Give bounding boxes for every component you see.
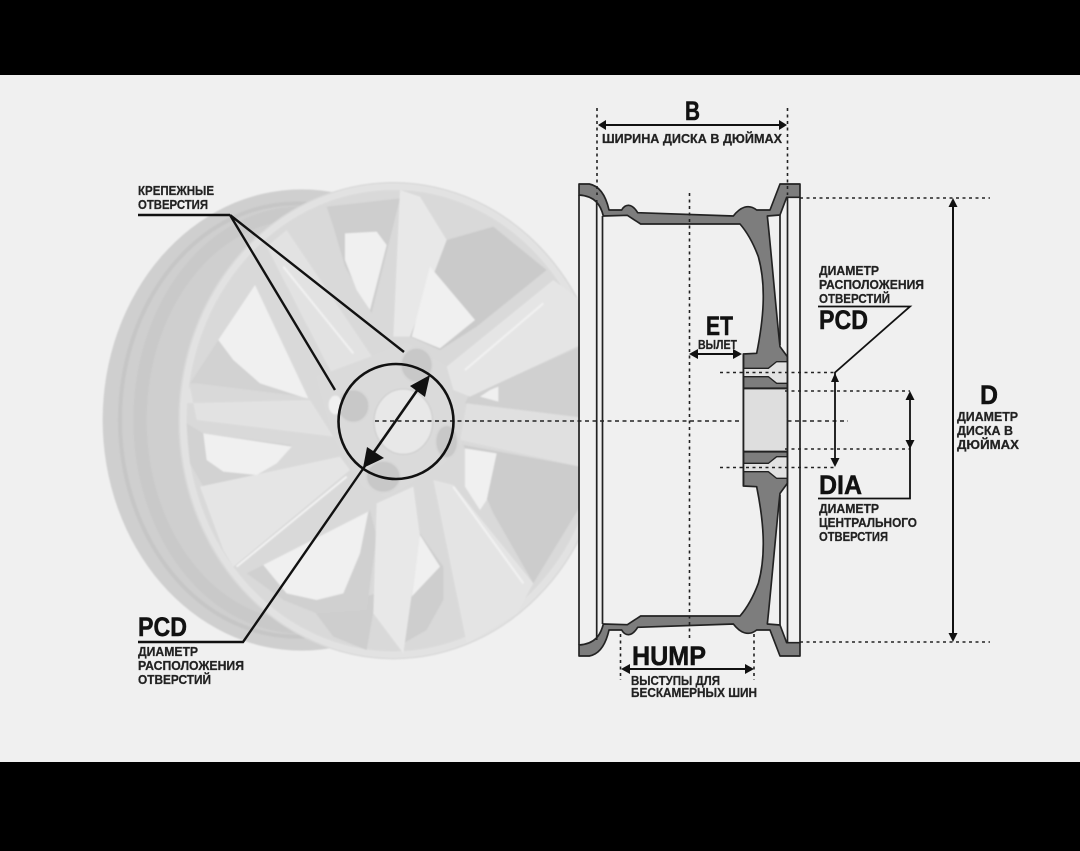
label: PCD right: ДИАМЕТР bbox=[819, 264, 879, 278]
label: PCD left: ОТВЕРСТИЙ bbox=[138, 672, 211, 687]
label: B: B bbox=[685, 96, 700, 126]
arrow and leader: DIA bbox=[818, 391, 914, 498]
wheel spoke faces bbox=[447, 280, 580, 397]
label: PCD left: ДИАМЕТР bbox=[138, 645, 198, 659]
arrow: ET bbox=[689, 349, 742, 359]
bolt holes bbox=[337, 348, 458, 493]
label: PCD left: РАСПОЛОЖЕНИЯ bbox=[138, 659, 244, 673]
label: D: ДЮЙМАХ bbox=[957, 437, 1020, 452]
rim vertical contour lines bbox=[579, 195, 800, 645]
label: PCD right bbox=[819, 264, 924, 335]
inner barrel dark areas bbox=[410, 227, 547, 350]
arrow: PCD diameter on wheel bbox=[363, 375, 430, 468]
dimension guide lines bbox=[597, 108, 990, 680]
label: B: ШИРИНА ДИСКА В ДЮЙМАХ bbox=[602, 131, 783, 146]
wheel front face bbox=[178, 182, 608, 659]
label: HUMP bbox=[631, 641, 757, 700]
wheel windows bbox=[218, 285, 308, 398]
cross-section lower half bbox=[579, 418, 800, 656]
label: DIA: ДИАМЕТР bbox=[819, 502, 879, 516]
leader: PCD label to wheel bbox=[138, 466, 365, 642]
label: DIA bbox=[819, 470, 917, 544]
label: PCD left: PCD bbox=[138, 612, 187, 642]
wheel illustration bbox=[103, 182, 608, 659]
hub bore lower bbox=[744, 418, 787, 451]
label: ET: ВЫЛЕТ bbox=[698, 338, 737, 352]
top black band bbox=[0, 0, 1080, 75]
label: B bbox=[602, 96, 783, 146]
arrow: width B bbox=[598, 120, 787, 130]
label: ET: ET bbox=[706, 311, 733, 341]
label: HUMP: БЕСКАМЕРНЫХ ШИН bbox=[631, 686, 757, 700]
PCD circle on wheel bbox=[338, 364, 454, 479]
label: DIA: ОТВЕРСТИЯ bbox=[819, 530, 888, 544]
label: bolt holes bbox=[138, 184, 214, 212]
label: bolt holes: ОТВЕРСТИЯ bbox=[138, 198, 208, 212]
bolt hole upper bbox=[743, 362, 787, 383]
label: HUMP: ВЫСТУПЫ ДЛЯ bbox=[631, 674, 720, 688]
bolt hole lower bbox=[743, 457, 787, 478]
label: PCD left bbox=[138, 612, 244, 687]
wheel barrel back rim bbox=[102, 189, 330, 651]
label: D: ДИАМЕТР bbox=[957, 410, 1018, 424]
label: bolt holes: КРЕПЕЖНЫЕ bbox=[138, 184, 214, 198]
label: DIA: DIA bbox=[819, 470, 862, 500]
center axis dashed line bbox=[375, 420, 848, 422]
cross-section upper half bbox=[579, 184, 800, 422]
center cap bbox=[374, 389, 433, 454]
wheel hub bbox=[317, 343, 462, 497]
arrow: HUMP bbox=[621, 664, 754, 674]
label: ET bbox=[698, 311, 737, 352]
arrow: D bbox=[948, 198, 958, 642]
rim cross-section bbox=[579, 184, 800, 656]
leader: bolt holes label bbox=[138, 215, 404, 390]
label: PCD right: РАСПОЛОЖЕНИЯ bbox=[819, 278, 924, 292]
bottom black band bbox=[0, 762, 1080, 851]
label: D: D bbox=[980, 380, 998, 410]
label: D bbox=[957, 380, 1020, 452]
label: PCD right: PCD bbox=[819, 305, 868, 335]
hub bore upper bbox=[744, 389, 787, 422]
label: DIA: ЦЕНТРАЛЬНОГО bbox=[819, 516, 917, 530]
label: HUMP: HUMP bbox=[632, 641, 706, 671]
label: PCD right: ОТВЕРСТИЙ bbox=[819, 291, 890, 306]
arrow and leader: PCD right bbox=[818, 306, 910, 467]
label: D: ДИСКА В bbox=[957, 424, 1013, 438]
